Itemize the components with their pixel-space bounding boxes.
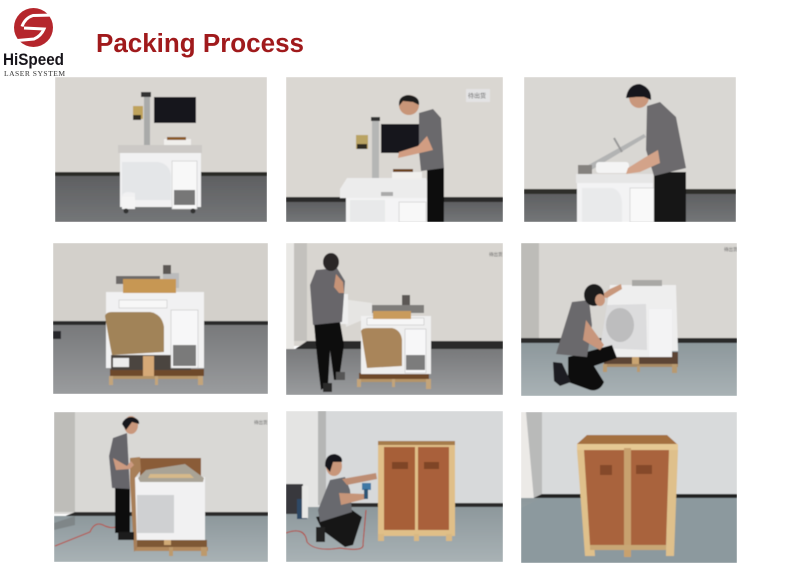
panel: step 1 machine on its own (55, 77, 267, 222)
cabinet (361, 316, 431, 374)
wrapped machine (600, 280, 678, 357)
tray on cabinet (164, 137, 191, 145)
cardboard sheet (105, 312, 164, 355)
panel: step 9 finished crate (521, 412, 737, 563)
orange box (372, 295, 424, 319)
side board (130, 457, 141, 552)
logo: HiSpeed Laser System (3, 6, 65, 78)
wall sign: 待出货 (254, 419, 268, 426)
worker (398, 95, 444, 222)
panel: step 6 crouching worker and wrapped machine (521, 243, 738, 396)
wrapped machine (135, 464, 205, 540)
wall sign: 待出货 (489, 251, 503, 258)
red cable (286, 510, 366, 549)
worker (626, 84, 686, 222)
panel: step 5 worker wrapping film (286, 243, 503, 395)
folded laser arm (578, 134, 646, 174)
wooden crate (577, 435, 678, 557)
wooden crate (378, 441, 455, 541)
panel: step 7 worker fitting crate side (54, 412, 268, 562)
orange box and folded laser (116, 265, 179, 293)
logo wordmark: HiSpeed (3, 51, 64, 69)
panel: step 8 worker fastening crate (286, 411, 503, 562)
logo emblem (12, 6, 56, 47)
laser column (133, 92, 151, 145)
panel: step 3 worker folding laser arm (524, 77, 736, 222)
back board (140, 458, 201, 476)
worker (310, 253, 345, 392)
wrapped cardboard (361, 328, 402, 368)
worker (109, 416, 139, 540)
monitor (381, 124, 424, 153)
laser column (356, 117, 380, 178)
logo tagline: LASER SYSTEM (4, 69, 65, 78)
film roll and stretch (339, 294, 372, 327)
wall sign: 待出货 (724, 246, 738, 253)
machine and film roll behind worker (286, 484, 308, 519)
pallet (109, 369, 204, 385)
title: Packing Process (96, 30, 304, 58)
panel: step 4 cardboard and pallet (53, 243, 268, 394)
cabinet (576, 174, 654, 222)
cabinet (340, 169, 430, 222)
worker (553, 284, 622, 390)
wall sign: 待出货 (468, 91, 486, 100)
pallet (357, 373, 431, 389)
cabinet (106, 292, 204, 376)
worker (316, 454, 377, 547)
pallet (603, 352, 678, 373)
wall sign (466, 89, 490, 102)
red cable (55, 524, 120, 546)
monitor (154, 97, 196, 123)
pallet (134, 540, 208, 556)
cabinet (118, 145, 202, 214)
panel: step 2 worker removing monitor (286, 77, 503, 222)
